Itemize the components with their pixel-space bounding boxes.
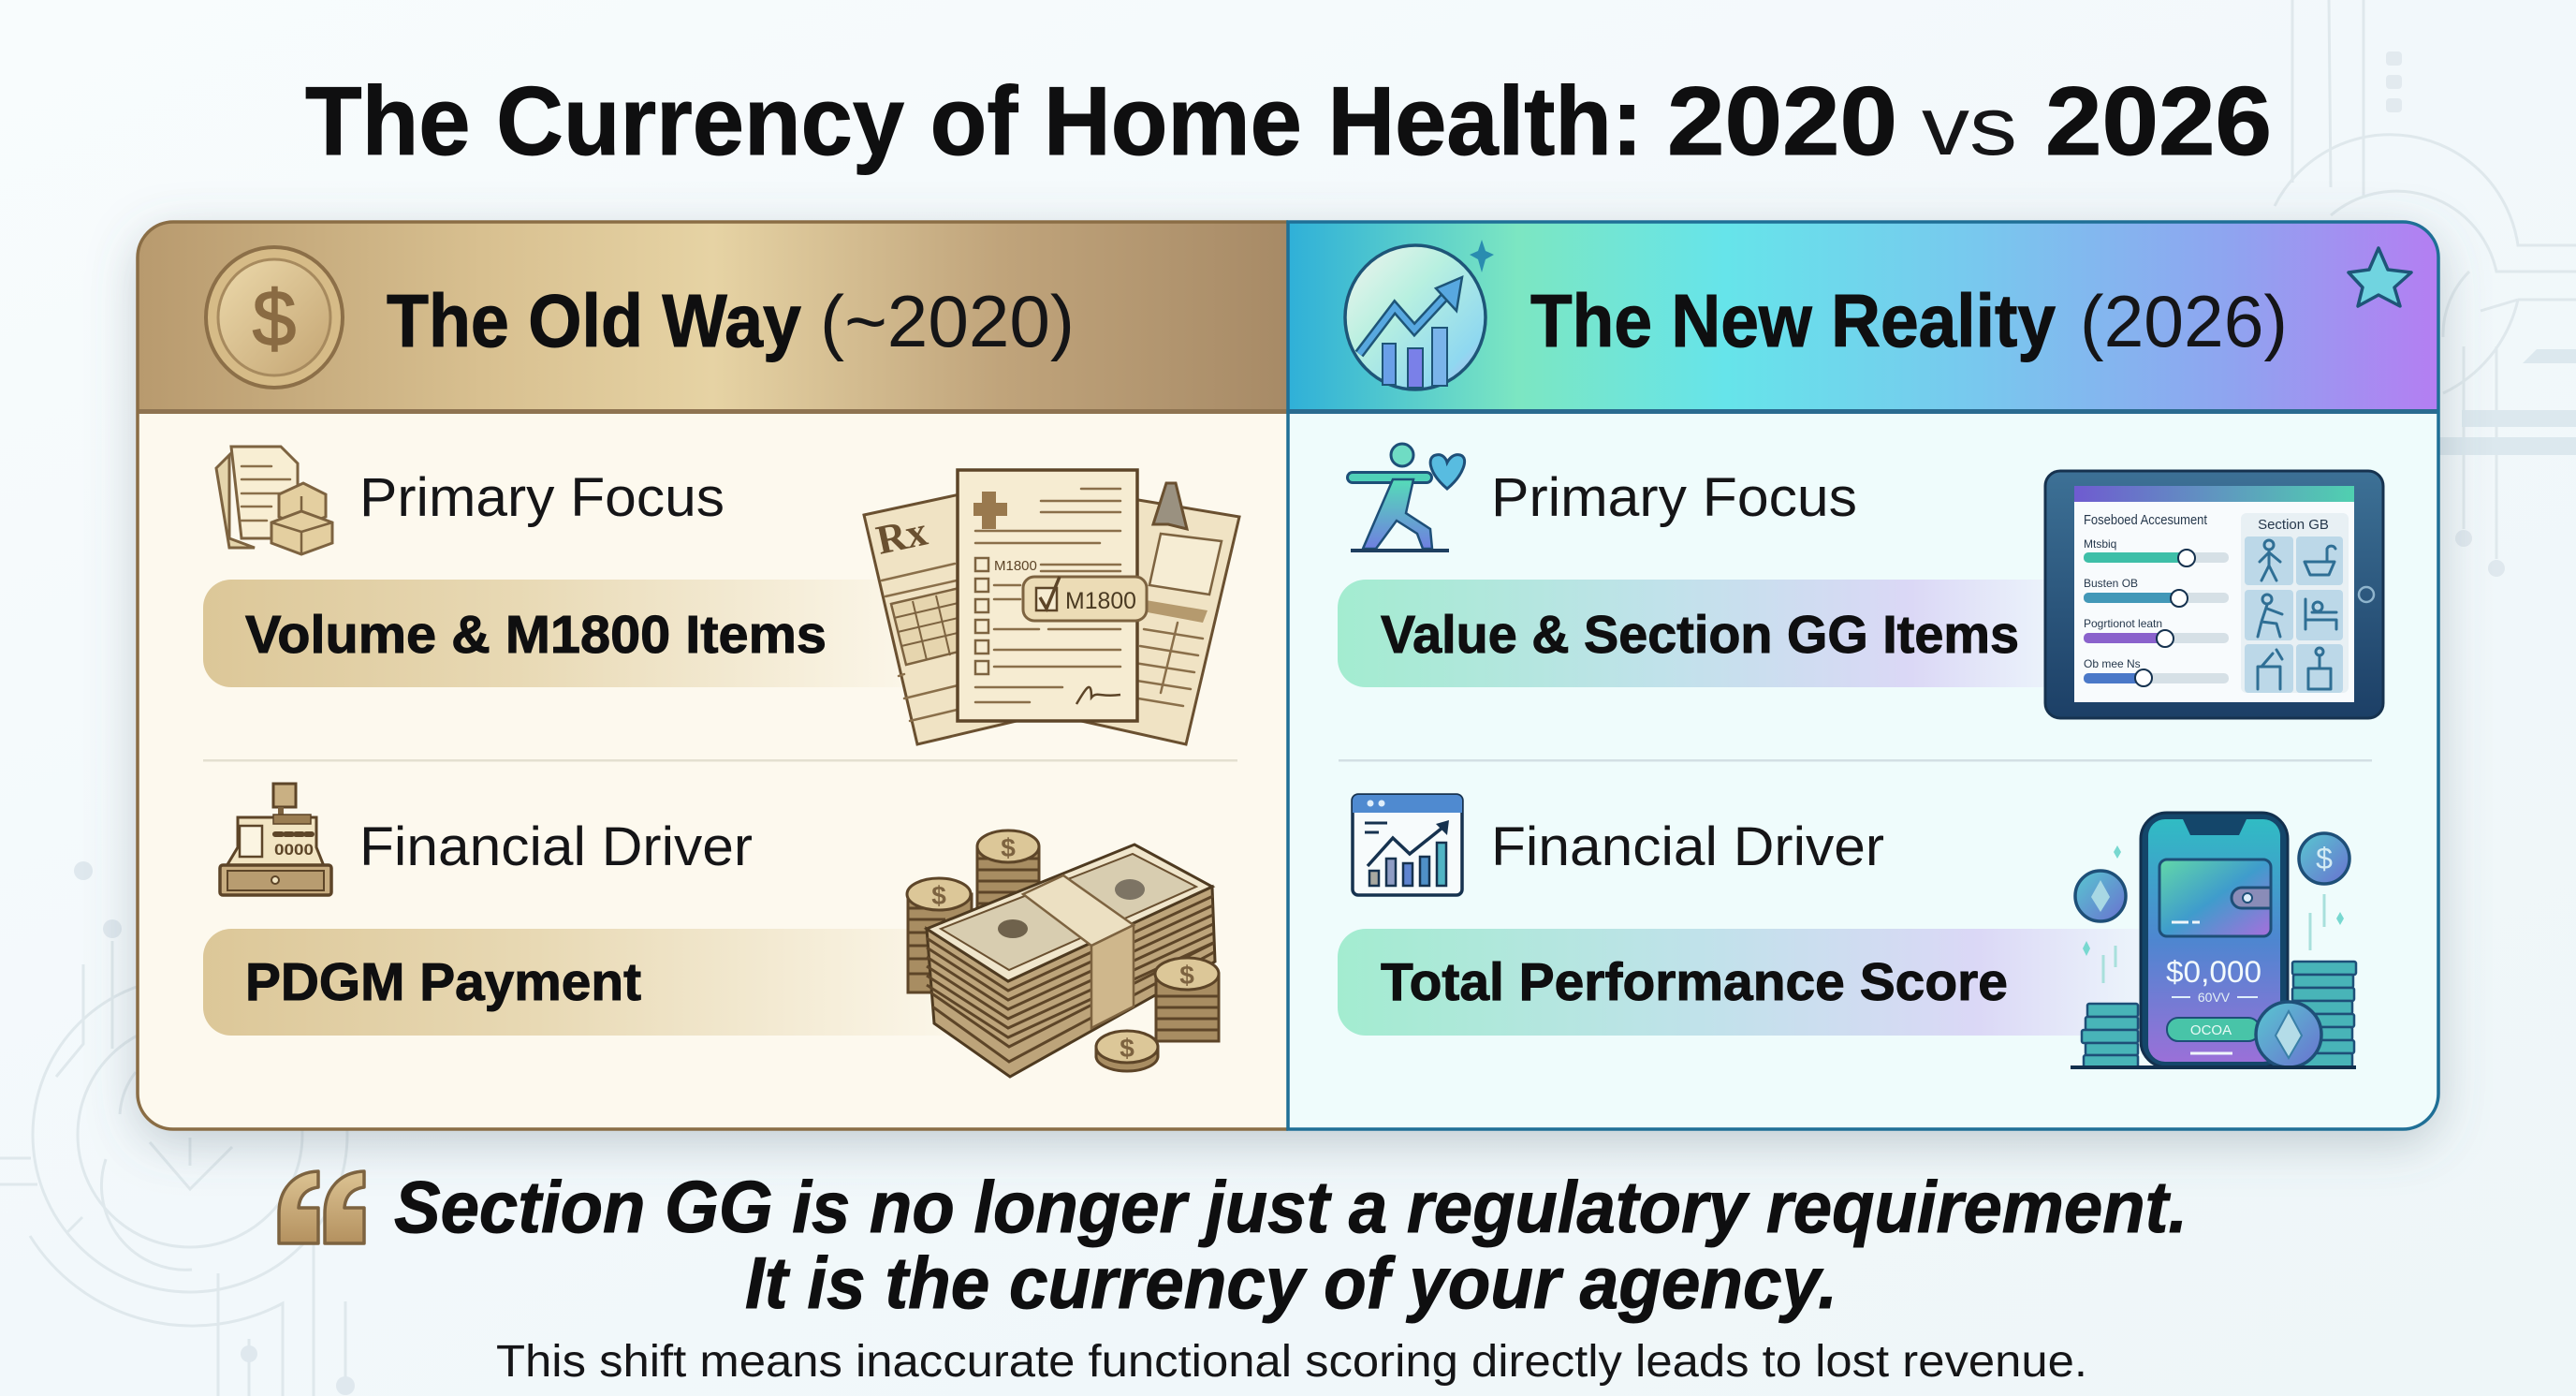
value pill: volume and m1800 items: Volume & M1800 Items (245, 605, 827, 665)
label: financial driver: Financial Driver (1491, 816, 1884, 877)
quote text (394, 1166, 2188, 1324)
heading: the old way: The Old Way (387, 279, 801, 362)
callout: m1800 badge: M1800 (1065, 588, 1136, 614)
heading: the new reality: (2026) (2080, 280, 2288, 362)
illustration: tablet assessment (2045, 471, 2383, 718)
illustration: cash and coins: $ (1001, 833, 1016, 862)
callout: m1800 badge (1023, 577, 1147, 621)
illustration: phone wallet and coins: $0,000 (2166, 955, 2261, 989)
illustration: tablet assessment: Busten OB (2084, 577, 2138, 590)
title: The Currency of Home Health: (305, 67, 1643, 176)
icon: growth chart globe (1345, 245, 1486, 389)
icon: chart window (1353, 795, 1462, 895)
value pill: total performance score (1338, 929, 2139, 1036)
value pill: total performance score: Total Performance Score (1381, 952, 2008, 1012)
illustration: phone wallet and coins: 60VV (2198, 990, 2231, 1005)
title: 2026 (2045, 67, 2272, 176)
illustration: cash and coins: $ (931, 881, 946, 910)
card shadow (138, 222, 2438, 1129)
illustration: paper forms: M1800 (994, 558, 1037, 574)
illustration: phone wallet and coins: OCOA (2190, 1022, 2232, 1038)
illustration: tablet assessment: Pogrtionot leatn (2084, 617, 2162, 630)
illustration: cash and coins: $ (1120, 1034, 1134, 1063)
illustration: paper forms: Rx (872, 508, 931, 564)
background circuit pattern: upper right (2275, 0, 2576, 577)
divider (1339, 759, 2372, 762)
value pill: pdgm payment (203, 929, 945, 1036)
icon: star (2349, 248, 2411, 306)
background circuit pattern: lower left (0, 861, 355, 1396)
illustration: tablet assessment: Mtsbiq (2084, 537, 2116, 551)
heading: the old way: (~2020) (820, 280, 1075, 362)
label: primary focus: Primary Focus (359, 467, 724, 528)
subtext: This shift means inaccurate functional scoring directly leads to lost revenue. (496, 1337, 2087, 1387)
label: primary focus: Primary Focus (1491, 467, 1857, 528)
value pill: value and section gg items (1338, 580, 2055, 687)
heading: the new reality: The New Reality (1530, 279, 2056, 362)
illustration: paper forms (864, 470, 1239, 744)
icon: quotation mark (279, 1171, 364, 1243)
label: financial driver: Financial Driver (359, 816, 753, 877)
icon: dollar coin (206, 247, 343, 388)
value pill: value and section gg items: Value & Section GG Items (1381, 605, 2019, 665)
value pill: pdgm payment: PDGM Payment (245, 952, 641, 1012)
illustration: tablet assessment: Section GB (2258, 517, 2329, 533)
icon: active person with heart (1351, 444, 1465, 551)
illustration: cash and coins: $ (1179, 961, 1194, 990)
icon: cash register (220, 784, 331, 895)
icon: dollar coin: $ (253, 274, 296, 362)
icon: cash register: 0000 (274, 841, 314, 859)
panel: the old way (138, 222, 1288, 1129)
heading: the old way (387, 279, 1075, 362)
illustration: tablet assessment: Foseboed Accesument (2084, 512, 2208, 528)
comparison card (138, 222, 2438, 1129)
icon: papers and boxes (216, 447, 332, 554)
divider (203, 759, 1237, 762)
illustration: cash and coins (907, 830, 1219, 1077)
title: 2020 (1667, 67, 1897, 176)
panel: the new reality (1288, 222, 2438, 1129)
quote text: Section GG is no longer just a regulatory requirement. (394, 1166, 2188, 1248)
value pill: volume and m1800 items (203, 580, 903, 687)
quote text: It is the currency of your agency. (745, 1242, 1837, 1324)
icon: sparkle (1470, 240, 1494, 272)
illustration: tablet assessment: Ob mee Ns (2084, 657, 2141, 670)
illustration: phone wallet and coins (2071, 813, 2356, 1067)
illustration: phone wallet and coins: $ (2316, 842, 2333, 875)
title: vs (1922, 80, 2017, 172)
